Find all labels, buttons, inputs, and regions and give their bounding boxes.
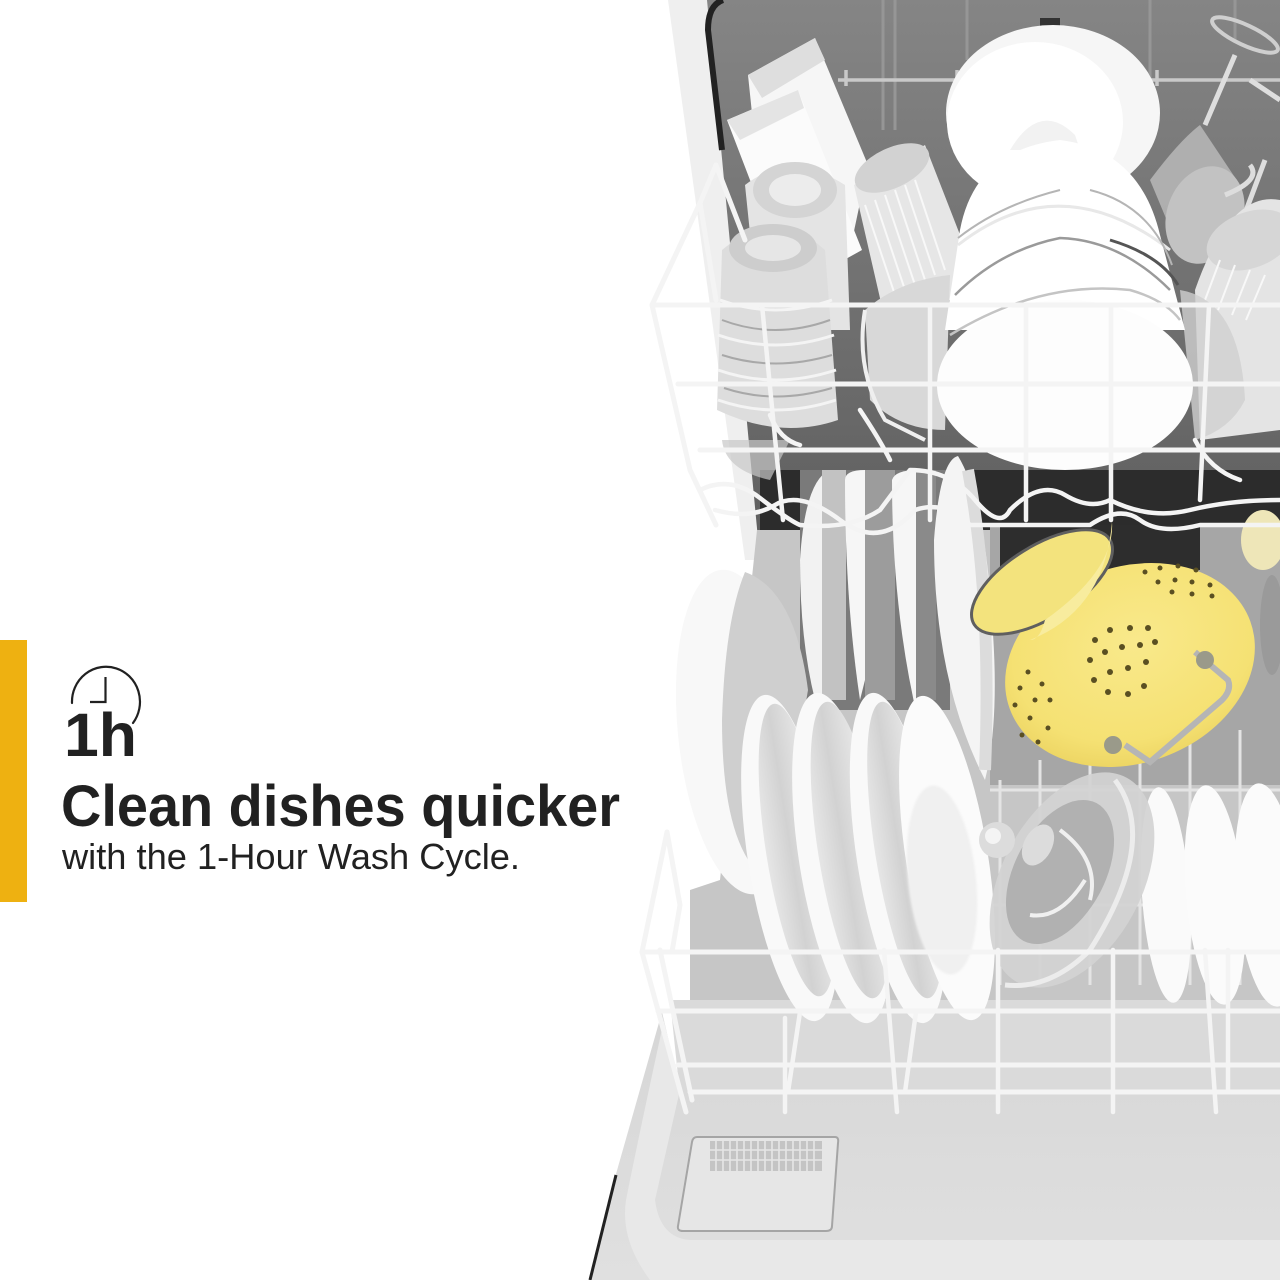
colander handle — [1125, 652, 1229, 762]
plate 3 — [831, 687, 965, 1029]
icon: one hour clock — [64, 667, 140, 769]
ribbed glass — [847, 133, 962, 440]
icon: one hour clock: 1h — [64, 701, 137, 769]
right side plates and cutlery — [1135, 510, 1280, 1009]
glass lid — [956, 745, 1188, 1015]
feature callout — [61, 667, 620, 877]
product photo: dishwasher — [589, 0, 1280, 1280]
top plate — [946, 25, 1160, 201]
accent bar — [0, 640, 27, 902]
heading: Clean dishes quicker — [61, 774, 620, 839]
plate 1 — [723, 688, 857, 1028]
vent cover — [678, 1137, 838, 1231]
front dinner plates — [723, 686, 1013, 1030]
dishwasher tub side wall — [668, 0, 775, 560]
subheading: with the 1-Hour Wash Cycle. — [61, 836, 520, 877]
plate 2 — [773, 686, 911, 1030]
upper wire rack — [652, 165, 1280, 533]
rear plates in lower rack — [800, 456, 995, 780]
rectangular glass dishes — [727, 38, 868, 290]
bowl stack — [945, 140, 1185, 330]
colander base ring — [955, 509, 1129, 655]
yellow colander — [955, 509, 1280, 801]
large serving bowl — [661, 564, 815, 900]
lower rack interior — [670, 525, 1280, 1095]
upper rack back rail — [838, 70, 1280, 86]
open door — [589, 1012, 1280, 1280]
stacked white bowls and plates — [937, 25, 1193, 470]
stemware on right — [1150, 11, 1280, 440]
colander holes — [1012, 564, 1214, 744]
plate 4 — [881, 690, 1013, 1026]
front bowl — [937, 300, 1193, 470]
tub back wall — [707, 0, 1280, 560]
stacked glass tumblers — [717, 162, 850, 480]
lower wire rack — [642, 832, 1280, 1112]
